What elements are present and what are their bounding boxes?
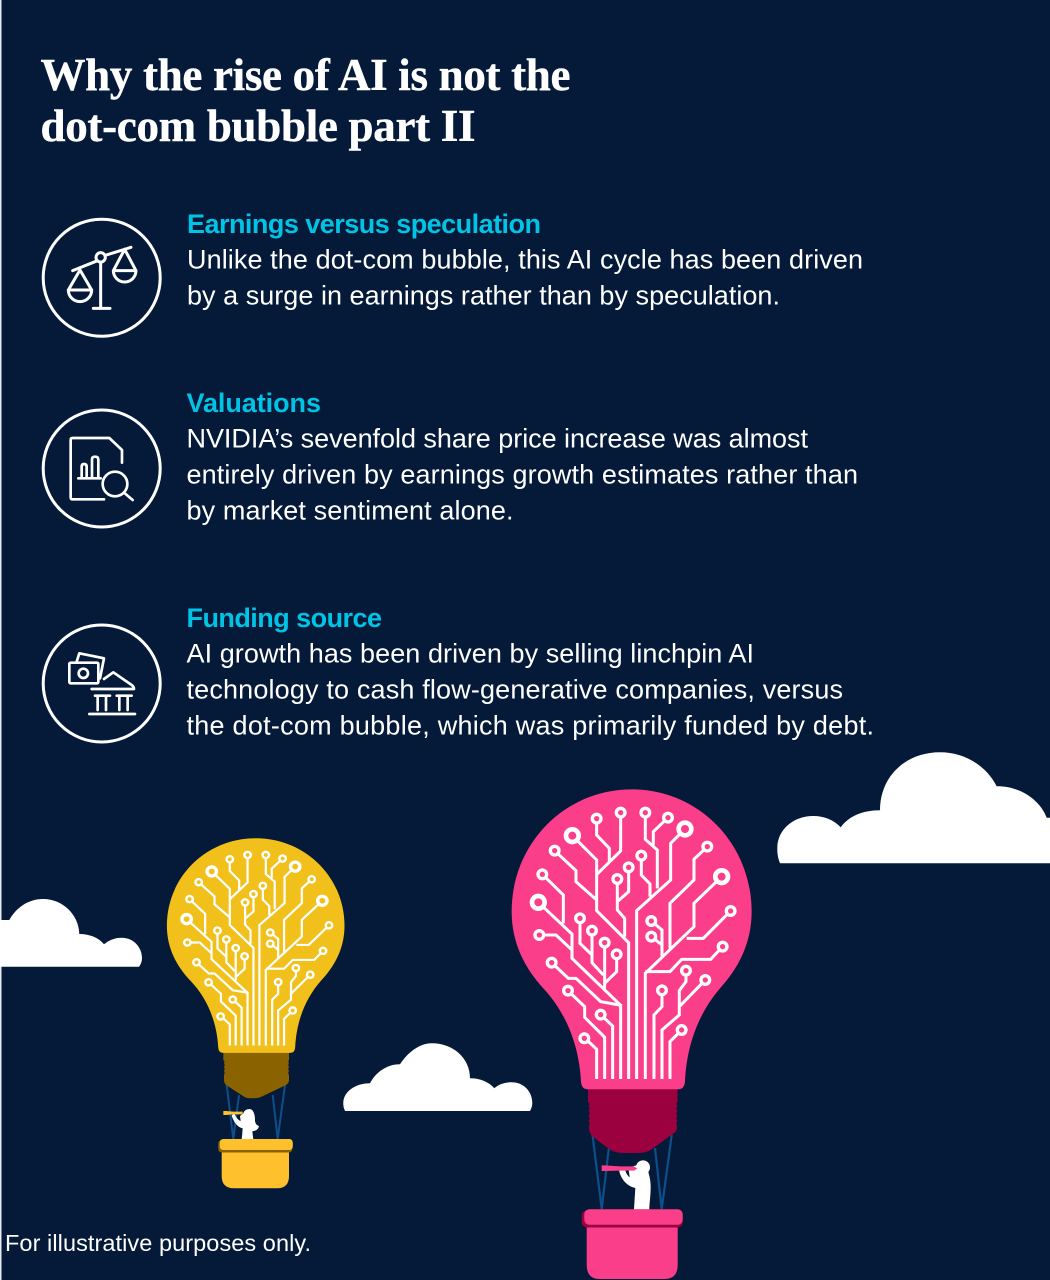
title: Why the rise of AI is not the — [40, 50, 570, 100]
text block: valuations: entirely driven by earnings growth estimates rather than — [186, 460, 858, 490]
pilot with telescope — [223, 1109, 259, 1139]
footnote: For illustrative purposes only. — [5, 1230, 311, 1256]
circuit tree — [532, 808, 735, 1079]
title: dot-com bubble part II — [40, 101, 476, 151]
balloon: pink lightbulb — [512, 789, 752, 1279]
cloud: middle — [343, 1043, 532, 1111]
bulb base — [223, 1050, 289, 1098]
text block: funding source — [186, 603, 874, 740]
bulb base — [588, 1085, 678, 1153]
pilot with telescope — [602, 1160, 651, 1209]
bulb — [167, 838, 345, 1053]
basket — [218, 1139, 293, 1188]
text block: earnings versus speculation — [187, 209, 863, 310]
icon: cash and bank — [43, 625, 160, 742]
ropes — [592, 1133, 672, 1209]
text block: funding source: technology to cash flow-generative companies, versus — [186, 674, 843, 704]
balloon: yellow lightbulb — [167, 838, 345, 1188]
text block: funding source: AI growth has been driven by selling linchpin AI — [186, 638, 754, 668]
bulb — [512, 789, 752, 1089]
basket — [582, 1209, 683, 1279]
text block: funding source: the dot-com bubble, which was primarily funded by debt. — [186, 710, 874, 740]
circuit tree — [182, 852, 332, 1046]
cloud: top right — [777, 752, 1050, 863]
text block: funding source: Funding source — [186, 603, 382, 633]
text block: valuations: by market sentiment alone. — [186, 496, 514, 526]
text block: earnings versus speculation: Earnings versus speculation — [187, 209, 541, 239]
text block: valuations: Valuations — [186, 388, 321, 418]
icon: balance scales — [43, 219, 160, 336]
text block: earnings versus speculation: Unlike the dot-com bubble, this AI cycle has been driven — [187, 244, 863, 274]
icon: document with chart and magnifier — [43, 410, 160, 527]
title — [40, 50, 570, 151]
ropes — [227, 1085, 285, 1139]
text block: earnings versus speculation: by a surge in earnings rather than by speculation. — [187, 280, 780, 310]
cloud: left — [0, 899, 142, 967]
text block: valuations — [186, 388, 858, 526]
text block: valuations: NVIDIA’s sevenfold share price increase was almost — [186, 424, 808, 454]
